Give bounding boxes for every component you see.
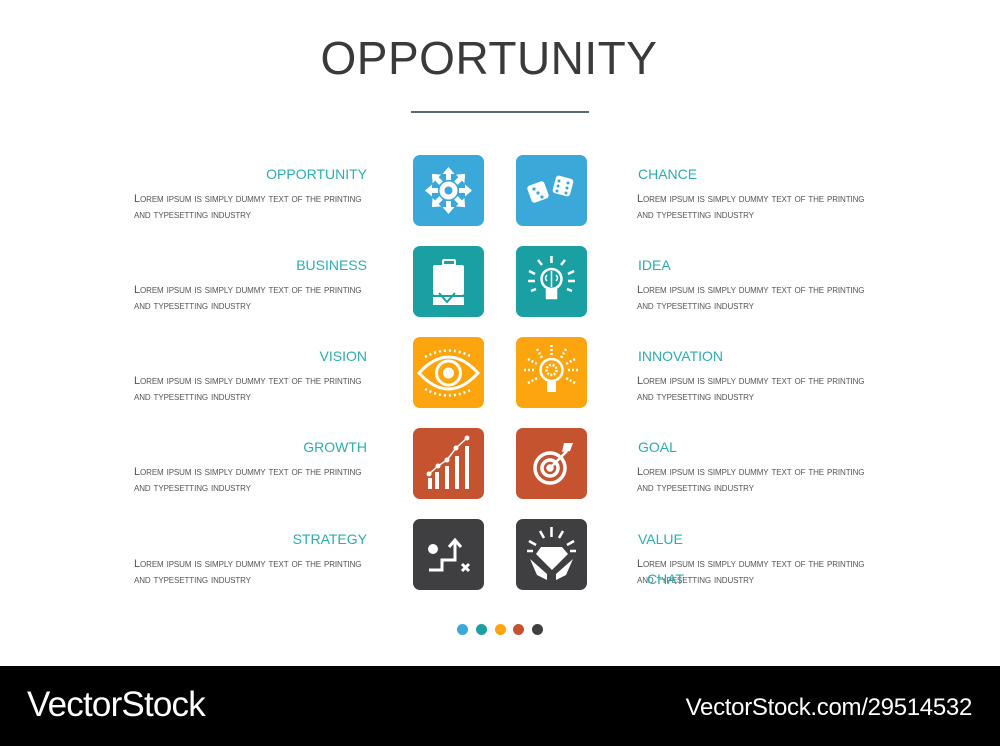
left item: vision bbox=[134, 348, 367, 403]
footer bar: VectorStock bbox=[27, 685, 205, 724]
icon: strategy bbox=[413, 519, 484, 590]
right item: innovation: and typesetting industry bbox=[637, 391, 754, 403]
right item: value: CHAT bbox=[647, 571, 684, 587]
right item: chance: CHANCE bbox=[638, 166, 697, 182]
right item: idea: Lorem ipsum is simply dummy text of the printing bbox=[637, 284, 864, 296]
left item: growth: and typesetting industry bbox=[134, 482, 251, 494]
right item: innovation bbox=[637, 348, 864, 403]
left item: strategy: Lorem ipsum is simply dummy text of the printing bbox=[134, 558, 361, 570]
footer bar: VectorStock.com/29514532 bbox=[686, 694, 972, 721]
footer bar bbox=[0, 666, 1000, 746]
left item: strategy bbox=[134, 531, 367, 586]
right item: chance bbox=[637, 166, 864, 221]
right item: innovation: Lorem ipsum is simply dummy text of the printing bbox=[637, 375, 864, 387]
right item: idea: IDEA bbox=[638, 257, 671, 273]
left item: opportunity bbox=[134, 166, 367, 221]
left item: business bbox=[134, 257, 367, 312]
icon: opportunity arrows bbox=[413, 155, 484, 226]
left item: opportunity: OPPORTUNITY bbox=[266, 166, 367, 182]
right item: value: Lorem ipsum is simply dummy text of the printing bbox=[637, 558, 864, 570]
left item: opportunity: Lorem ipsum is simply dummy text of the printing bbox=[134, 193, 361, 205]
left item: strategy: and typesetting industry bbox=[134, 574, 251, 586]
icon: value diamond bbox=[516, 519, 587, 590]
left item: strategy: STRATEGY bbox=[293, 531, 367, 547]
right item: value: and typesetting industry bbox=[637, 574, 754, 586]
right item: innovation: INNOVATION bbox=[638, 348, 723, 364]
left item: vision: and typesetting industry bbox=[134, 391, 251, 403]
left item: vision: VISION bbox=[320, 348, 367, 364]
right item: value: VALUE bbox=[638, 531, 683, 547]
left item: business: BUSINESS bbox=[296, 257, 367, 273]
left item: growth bbox=[134, 439, 367, 494]
icon: innovation bulb bbox=[516, 337, 587, 408]
icon: business bbox=[413, 246, 484, 317]
right item: idea bbox=[637, 257, 864, 312]
icon: dice bbox=[516, 155, 587, 226]
pagination dots bbox=[457, 624, 543, 635]
icon: growth chart bbox=[413, 428, 484, 499]
icon: vision eye bbox=[413, 337, 484, 408]
left item: vision: Lorem ipsum is simply dummy text of the printing bbox=[134, 375, 361, 387]
left item: growth: GROWTH bbox=[303, 439, 367, 455]
title: OPPORTUNITY bbox=[321, 32, 657, 84]
right item: chance: and typesetting industry bbox=[637, 209, 754, 221]
left item: growth: Lorem ipsum is simply dummy text of the printing bbox=[134, 466, 361, 478]
right item: goal: GOAL bbox=[638, 439, 677, 455]
left item: business: Lorem ipsum is simply dummy text of the printing bbox=[134, 284, 361, 296]
right item: value bbox=[637, 531, 864, 587]
right item: goal: and typesetting industry bbox=[637, 482, 754, 494]
icon: idea brain bbox=[516, 246, 587, 317]
right item: goal: Lorem ipsum is simply dummy text of the printing bbox=[637, 466, 864, 478]
right item: chance: Lorem ipsum is simply dummy text of the printing bbox=[637, 193, 864, 205]
left item: opportunity: and typesetting industry bbox=[134, 209, 251, 221]
icon: goal target bbox=[516, 428, 587, 499]
left item: business: and typesetting industry bbox=[134, 300, 251, 312]
right item: idea: and typesetting industry bbox=[637, 300, 754, 312]
right item: goal bbox=[637, 439, 864, 494]
